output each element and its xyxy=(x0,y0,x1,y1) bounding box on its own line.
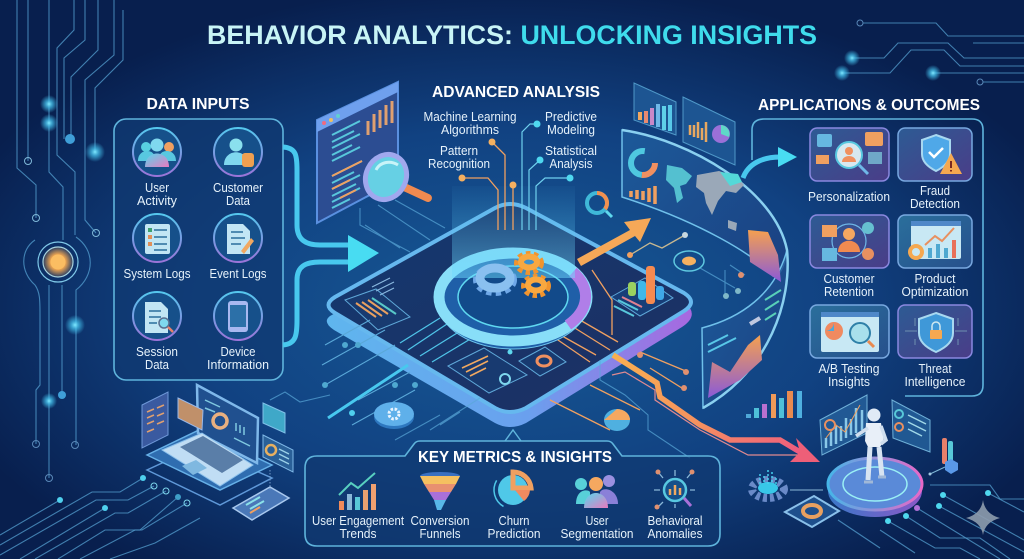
illustration: robot on podium xyxy=(820,395,930,517)
label: conversion funnels xyxy=(410,513,470,541)
label: A/B testing insights: Insights xyxy=(828,374,870,389)
icon: session data xyxy=(133,292,181,340)
lower right nodes xyxy=(880,485,1024,559)
small card on board: list xyxy=(448,348,527,393)
label: conversion funnels: Conversion xyxy=(410,513,470,528)
heading: key metrics: KEY METRICS & INSIGHTS xyxy=(418,449,612,466)
card: personalization xyxy=(810,128,889,181)
text block: analysis methods: Algorithms xyxy=(441,122,499,137)
icon: glowing gear xyxy=(752,470,823,498)
icon: user segmentation xyxy=(575,475,618,508)
laptop base xyxy=(162,433,253,486)
label: customer retention: Customer xyxy=(824,271,875,286)
isometric bar chart on board xyxy=(611,266,673,316)
floating screen left xyxy=(142,392,168,448)
icon: magnifying glass xyxy=(358,148,428,206)
label: user segmentation: User xyxy=(586,513,609,528)
label: product optimization: Product xyxy=(914,271,956,286)
label: user segmentation xyxy=(560,513,634,541)
label: personalization: Personalization xyxy=(808,189,890,204)
floating donut screen xyxy=(263,435,293,472)
label: user activity xyxy=(137,180,177,208)
robot figure xyxy=(856,408,886,482)
label: session data: Session xyxy=(136,344,178,359)
label: system logs: System Logs xyxy=(124,266,191,281)
card: fraud detection xyxy=(898,128,972,181)
arrow: data inputs into platform xyxy=(283,147,379,345)
card: customer retention xyxy=(810,215,889,268)
trend line nodes xyxy=(627,232,745,299)
label: user engagement trends: Trends xyxy=(340,526,377,541)
circuit lines below left monitor xyxy=(360,200,445,252)
label: customer data: Customer xyxy=(213,180,264,195)
label: churn prediction xyxy=(488,513,540,541)
panel: applications and outcomes xyxy=(752,119,983,396)
label: threat intelligence xyxy=(904,361,966,389)
label: threat intelligence: Intelligence xyxy=(904,374,966,389)
card: threat intelligence xyxy=(898,305,972,358)
label: user engagement trends xyxy=(312,513,404,541)
laptop screen xyxy=(197,385,258,463)
label: device information: Information xyxy=(207,357,269,372)
arrow: pink orange path to robot xyxy=(613,355,820,462)
label: user segmentation: Segmentation xyxy=(560,526,634,541)
phone xyxy=(233,487,289,520)
arrow: dashboard to applications xyxy=(743,147,797,178)
panel: key metrics and insights xyxy=(305,430,720,546)
curved dashboard band xyxy=(622,130,788,408)
card: product optimization xyxy=(898,215,972,268)
panel: data inputs xyxy=(114,119,283,380)
icon: user activity xyxy=(133,128,181,176)
label: user engagement trends: User Engagement xyxy=(312,513,404,528)
illustration: laptop with floating screens xyxy=(142,385,330,520)
platform: central processing board xyxy=(327,186,692,427)
central ring xyxy=(438,253,588,349)
arrow: orange output xyxy=(577,218,651,266)
label: fraud detection: Fraud xyxy=(920,183,950,198)
donut chart xyxy=(631,151,655,175)
icon: gear tile lower right xyxy=(785,496,880,548)
bar lines lower xyxy=(765,290,781,320)
text block: analysis methods: Modeling xyxy=(547,122,595,137)
label: product optimization: Optimization xyxy=(902,284,968,299)
text block: analysis methods: Recognition xyxy=(428,156,490,171)
label: customer retention: Retention xyxy=(824,284,874,299)
label: A/B testing insights: A/B Testing xyxy=(818,361,880,376)
text block: analysis methods xyxy=(424,109,597,171)
monitor: code and charts xyxy=(317,82,398,223)
bar chart: floating bars xyxy=(746,391,802,418)
label: event logs: Event Logs xyxy=(210,266,267,281)
label: fraud detection: Detection xyxy=(910,196,960,211)
platform top xyxy=(328,204,691,412)
label: behavioral anomalies: Behavioral xyxy=(648,513,703,528)
label: fraud detection xyxy=(910,183,960,211)
icon: behavioral anomalies xyxy=(654,470,695,510)
small bars xyxy=(631,186,655,204)
label: device information: Device xyxy=(220,344,256,359)
icon: small flask chart xyxy=(928,438,958,476)
circuits below platform xyxy=(322,320,800,458)
lower band xyxy=(702,250,788,408)
label: churn prediction: Prediction xyxy=(488,526,540,541)
floating screen upper right xyxy=(263,403,285,433)
small card on board: gear xyxy=(519,347,566,376)
label: session data: Data xyxy=(145,357,170,372)
text block: analysis methods: Statistical xyxy=(545,143,597,158)
label: customer retention xyxy=(824,271,875,299)
icon: system logs xyxy=(133,214,181,262)
label: churn prediction: Churn xyxy=(498,513,530,528)
data beam xyxy=(452,186,575,278)
top right circuit decoration xyxy=(834,20,1024,85)
label: session data xyxy=(136,344,178,372)
label: behavioral anomalies: Anomalies xyxy=(648,526,703,541)
label: threat intelligence: Threat xyxy=(918,361,952,376)
icon: engagement bars and trend xyxy=(339,473,376,510)
text block: analysis methods: Predictive xyxy=(545,109,597,124)
icon: device information xyxy=(214,292,262,340)
floating screen orange xyxy=(178,398,203,430)
text lines on board xyxy=(372,278,394,295)
card: A/B testing insights xyxy=(810,305,889,358)
holographic screens xyxy=(820,395,867,455)
label: product optimization xyxy=(902,271,968,299)
podium xyxy=(828,465,922,517)
label: A/B testing insights xyxy=(818,361,880,389)
label: customer data xyxy=(213,180,264,208)
label: device information xyxy=(207,344,269,372)
icon: sparkle watermark xyxy=(966,500,1000,535)
heading: advanced analysis: ADVANCED ANALYSIS xyxy=(432,84,600,101)
label: user activity: Activity xyxy=(137,193,177,208)
area chart panel xyxy=(748,230,781,282)
label: behavioral anomalies xyxy=(648,513,703,541)
upper band xyxy=(622,130,787,276)
icon: churn pie xyxy=(487,464,539,516)
gears xyxy=(477,255,547,294)
text block: analysis methods: Pattern xyxy=(440,143,478,158)
lower left circuit decoration xyxy=(0,475,200,559)
text block: analysis methods: Analysis xyxy=(550,156,593,171)
lower area chart xyxy=(708,335,762,398)
small card on board: equalizer xyxy=(345,289,410,330)
heading: applications and outcomes: APPLICATIONS & OUTCOMES xyxy=(758,97,980,114)
label: conversion funnels: Funnels xyxy=(420,526,461,541)
world map xyxy=(666,165,744,231)
circuit lines into analysis core xyxy=(458,120,574,230)
icon: funnel xyxy=(420,472,460,510)
icon: customer data xyxy=(214,128,262,176)
icon: gear tile xyxy=(374,402,414,429)
title: BEHAVIOR ANALYTICS: UNLOCKING INSIGHTS xyxy=(207,20,817,50)
platform edge xyxy=(327,218,692,427)
label: user activity: User xyxy=(145,180,170,195)
label: customer data: Data xyxy=(226,193,251,208)
icon: event logs xyxy=(214,214,262,262)
circuit traces on board xyxy=(400,270,618,362)
left circuit decoration with glowing orange node xyxy=(17,0,123,482)
mini chart panels above dashboard xyxy=(634,83,735,165)
heading: data inputs: DATA INPUTS xyxy=(146,96,250,113)
icon: small analysis ring xyxy=(587,193,612,217)
text block: analysis methods: Machine Learning xyxy=(424,109,516,124)
